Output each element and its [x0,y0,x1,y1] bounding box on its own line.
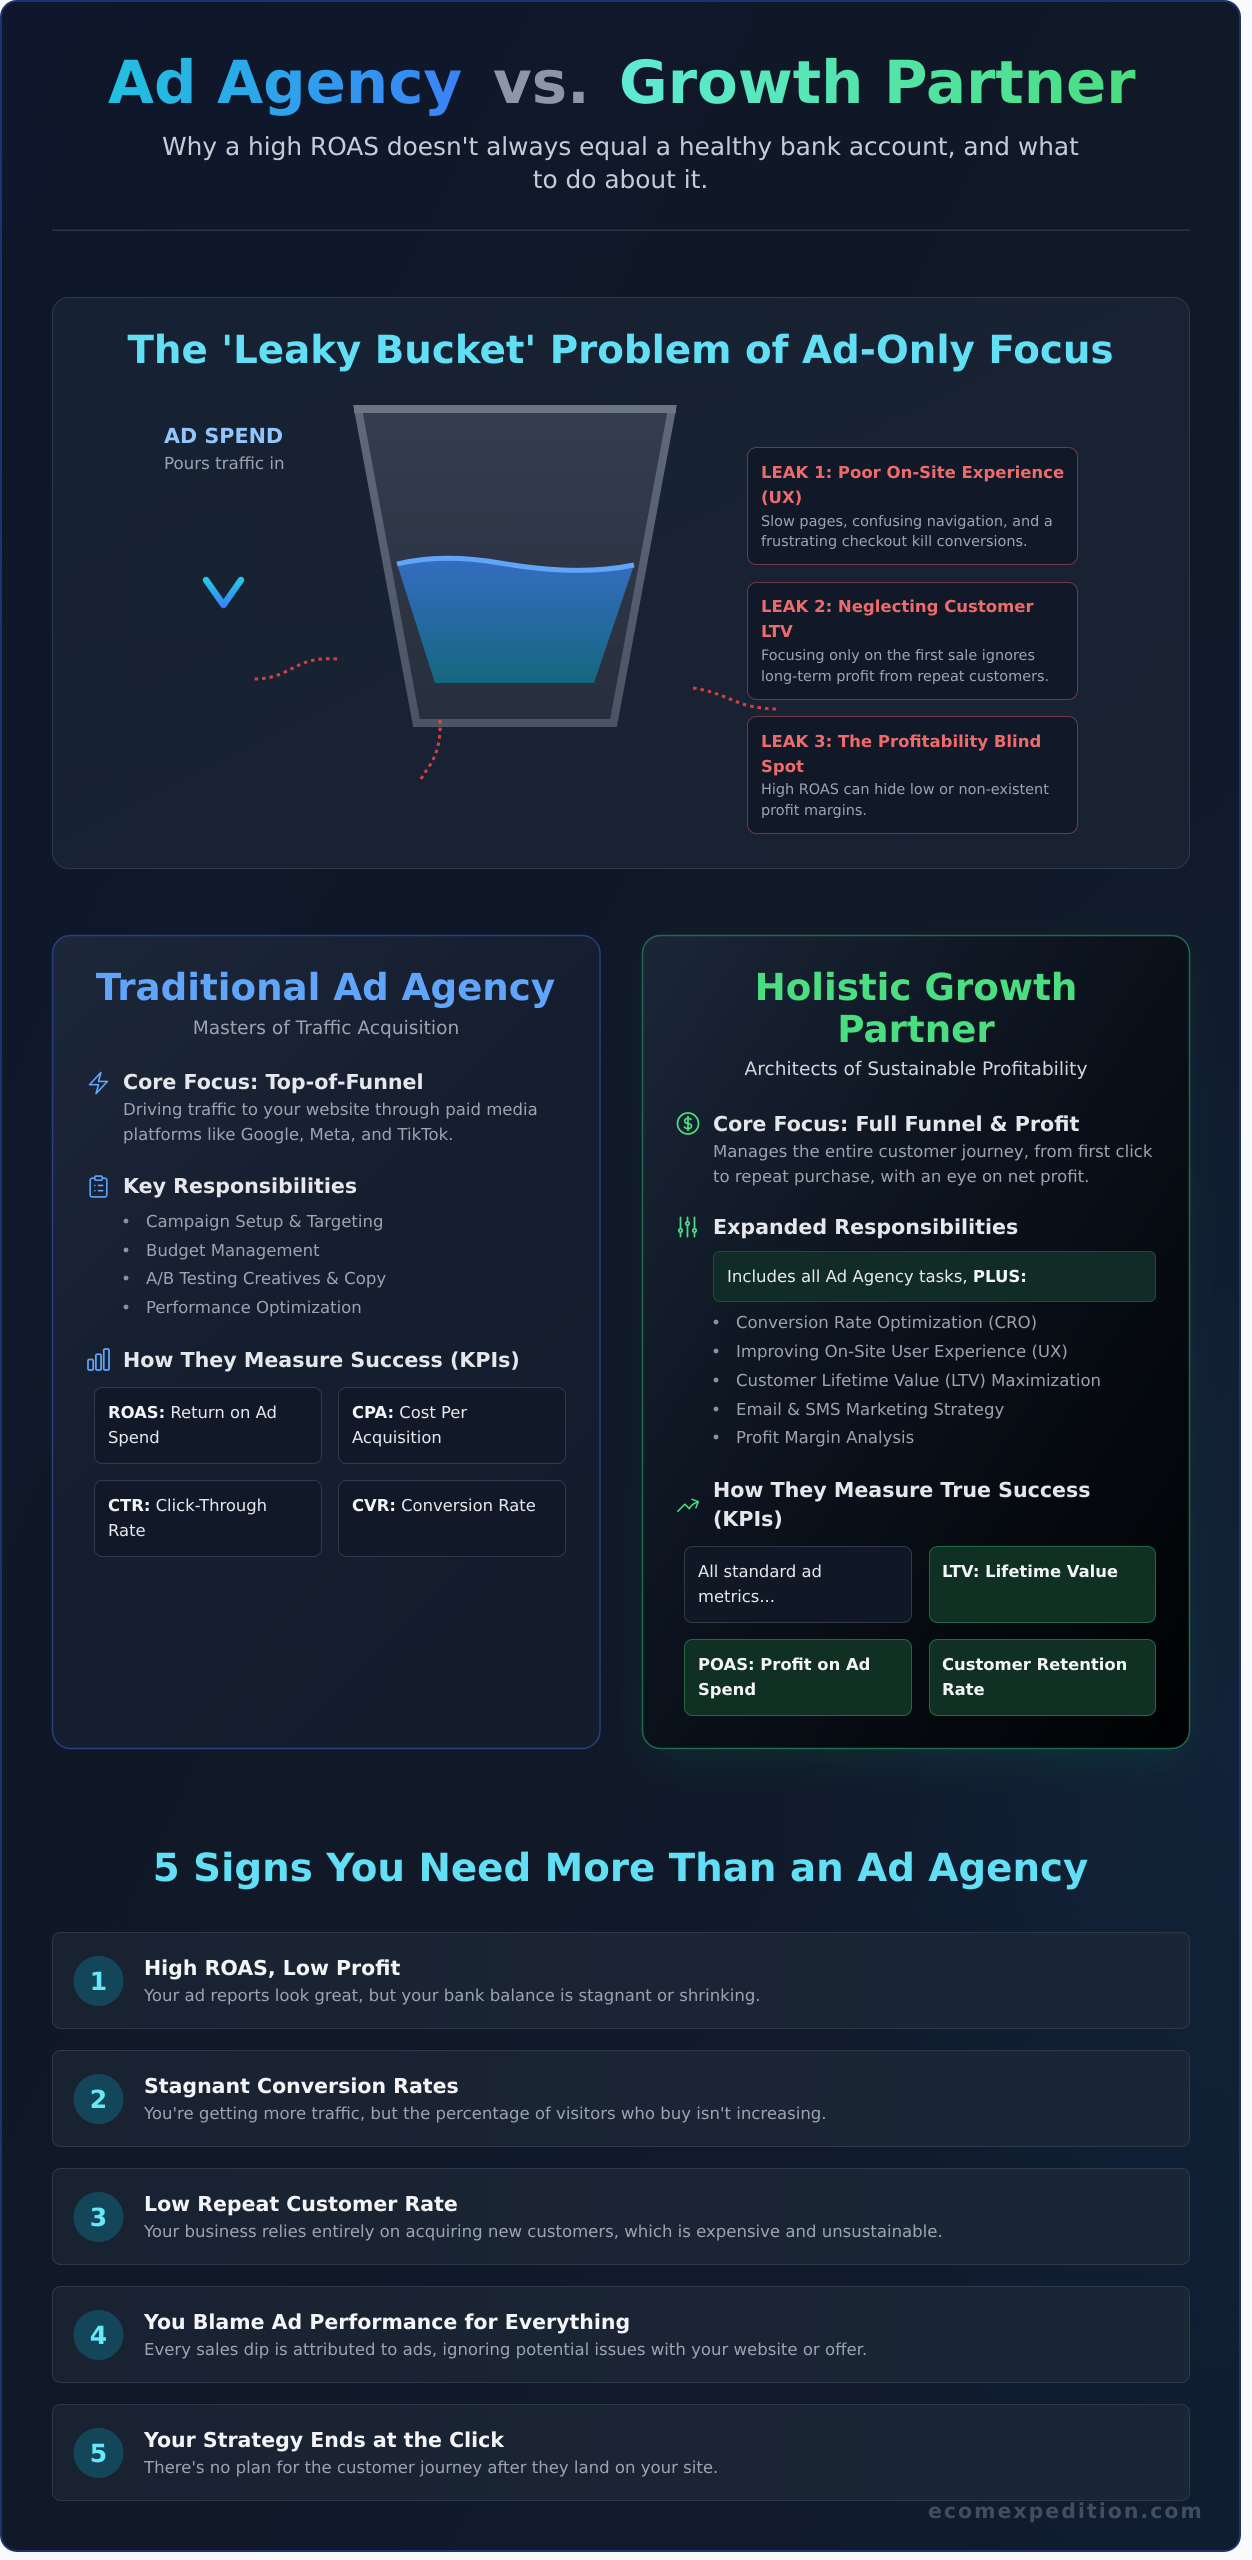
callout: leak 1: LEAK 1: Poor On-Site Experience [761,463,1064,482]
panel subtitle: Architects of Sustainable Profitability [745,1059,1087,1080]
core focus block [90,1070,538,1144]
icon: sliders [678,1216,698,1238]
KPI card: CVR [338,1480,566,1556]
sign 4: You Blame Ad Performance for Everything [143,2310,630,2334]
expanded responsibilities block: Email & SMS Marketing Strategy [736,1400,1004,1419]
leak drips [254,659,776,782]
sign 1: Your ad reports look great, but your bank balance is stagnant or shrinking. [143,1986,761,2005]
sign 4: Every sales dip is attributed to ads, ignoring potential issues with your website or offer. [144,2340,867,2359]
KPI card: retention: Customer Retention [942,1655,1127,1674]
section heading: 5 signs: 5 Signs You Need More Than an Ad Agency [153,1846,1088,1891]
panel: leaky bucket problem [52,298,1190,868]
callout: leak 1: frustrating checkout kill conversions. [761,534,1028,550]
KPI card: standard metrics: metrics... [698,1587,775,1606]
KPI card: standard metrics: All standard ad [698,1562,822,1581]
KPI card: CPA: Acquisition [352,1428,442,1447]
expanded responsibilities block [679,1215,1156,1447]
callout: leak 3: High ROAS can hide low or non-existent [761,782,1049,798]
sign 5 [52,2404,1190,2500]
callout: leak 3: Spot [761,757,804,776]
expanded responsibilities block: Improving On-Site User Experience (UX) [736,1342,1068,1361]
title: Growth Partner [619,49,1136,118]
KPI card: CTR: Rate [108,1521,146,1540]
KPI block [88,1348,566,1556]
expanded responsibilities block: Profit Margin Analysis [736,1428,914,1447]
expanded responsibilities block: Customer Lifetime Value (LTV) Maximization [736,1371,1101,1390]
sign 3: Low Repeat Customer Rate [144,2192,458,2216]
sign 3 [52,2168,1190,2264]
sign 1: High ROAS, Low Profit [144,1956,400,1980]
key responsibilities block: A/B Testing Creatives & Copy [146,1269,386,1288]
sign 5: Your Strategy Ends at the Click [143,2428,505,2452]
title [108,49,1136,118]
sign 2: Stagnant Conversion Rates [144,2074,459,2098]
sign 2: 2 [90,2085,107,2114]
key responsibilities block: Budget Management [146,1241,320,1260]
KPI block: How They Measure Success (KPIs) [123,1348,520,1372]
callout: includes all tasks plus [714,1252,1156,1302]
subtitle [162,132,1079,194]
callout: leak 1: (UX) [761,488,802,507]
core focus block: Core Focus: Top-of-Funnel [123,1070,424,1094]
panel: traditional ad agency [52,936,600,1748]
panel heading: holistic growth partner [755,965,1077,1051]
key responsibilities block: Performance Optimization [146,1298,362,1317]
sign 3: 3 [90,2203,107,2232]
subtitle: Why a high ROAS doesn't always equal a healthy bank account, and what [162,132,1079,161]
bucket illustration [354,405,676,723]
sign 4 [52,2286,1190,2382]
KPI card: ROAS: Spend [108,1428,160,1447]
sign 4: 4 [90,2321,107,2350]
sign 2 [52,2050,1190,2146]
section heading: leaky bucket: The 'Leaky Bucket' Problem of Ad-Only Focus [127,328,1114,373]
sign 2: You're getting more traffic, but the percentage of visitors who buy isn't increasing. [143,2104,827,2123]
callout: leak 3 [748,716,1078,834]
true KPI block: How They Measure True Success [713,1478,1091,1502]
title: Ad Agency [108,49,462,118]
icon: trending up arrow [677,1498,699,1512]
panel subtitle: Masters of Traffic Acquisition [193,1018,459,1039]
panel heading: holistic growth partner: Partner [837,1007,995,1051]
KPI card: POAS [684,1640,912,1716]
KPI card: POAS: POAS: Profit on Ad [698,1655,870,1674]
icon: dollar circle [676,1112,700,1135]
panel: holistic growth partner [642,936,1190,1760]
callout: leak 1 [748,448,1078,564]
KPI card: CTR [94,1480,322,1556]
ad spend label: Pours traffic in [164,453,285,473]
sign 3: Your business relies entirely on acquiring new customers, which is expensive and unsustainable. [143,2222,943,2241]
key responsibilities block: Key Responsibilities [123,1174,357,1198]
core focus block: Core Focus: Full Funnel & Profit [713,1112,1079,1136]
expanded responsibilities block: Expanded Responsibilities [713,1215,1018,1239]
title: vs. [493,49,590,118]
KPI card: CTR: CTR: Click-Through [108,1496,267,1515]
ad spend label [164,424,285,473]
sign 1 [52,1932,1190,2028]
icon: bar chart [87,1348,110,1371]
ad spend label: AD SPEND [164,424,283,448]
callout: leak 2: LTV [761,622,793,641]
KPI card: retention: Rate [942,1680,985,1699]
KPI card: standard metrics [684,1546,912,1622]
subtitle: to do about it. [533,165,708,194]
true KPI block: (KPIs) [713,1507,783,1531]
callout: leak 2: Focusing only on the first sale ignores [761,648,1035,664]
KPI card: retention [930,1640,1156,1716]
KPI card: CPA: CPA: Cost Per [352,1403,467,1422]
KPI card: ROAS: ROAS: Return on Ad [108,1403,277,1422]
icon: down chevron arrow [206,580,241,605]
panel heading: traditional ad agency: Traditional Ad Agency [96,965,555,1009]
KPI card: ROAS [94,1388,322,1464]
KPI card: LTV: LTV: Lifetime Value [942,1562,1118,1581]
core focus block: to repeat purchase, with an eye on net profit. [713,1167,1089,1186]
icon: lightning bolt [88,1072,108,1094]
KPI card: CPA [338,1388,566,1464]
KPI card: POAS: Spend [698,1680,756,1699]
callout: leak 3: LEAK 3: The Profitability Blind [761,732,1041,751]
callout: leak 2: long-term profit from repeat customers. [761,669,1049,685]
icon: clipboard list [89,1175,108,1198]
callout: leak 2 [748,582,1078,700]
core focus block: Manages the entire customer journey, from first click [713,1142,1153,1161]
key responsibilities block [90,1174,386,1317]
expanded responsibilities block: Conversion Rate Optimization (CRO) [736,1313,1037,1332]
watermark: ecomexpedition.com [928,2499,1204,2523]
key responsibilities block: Campaign Setup & Targeting [146,1212,383,1231]
callout: leak 1: Slow pages, confusing navigation, and a [761,514,1053,530]
core focus block: platforms like Google, Meta, and TikTok. [123,1125,453,1144]
panel heading: holistic growth partner: Holistic Growth [755,965,1077,1009]
callout: leak 3: profit margins. [761,803,867,819]
sign 1: 1 [90,1967,107,1996]
core focus block [678,1112,1153,1186]
KPI card: LTV [930,1546,1156,1622]
callout: includes all tasks plus: Includes all Ad Agency tasks, PLUS: [727,1267,1027,1286]
sign 5: There's no plan for the customer journey after they land on your site. [143,2458,718,2477]
core focus block: Driving traffic to your website through paid media [123,1100,538,1119]
KPI card: CVR: CVR: Conversion Rate [352,1496,536,1515]
callout: leak 2: LEAK 2: Neglecting Customer [761,597,1034,616]
sign 5: 5 [90,2439,107,2468]
true KPI block [678,1478,1156,1716]
